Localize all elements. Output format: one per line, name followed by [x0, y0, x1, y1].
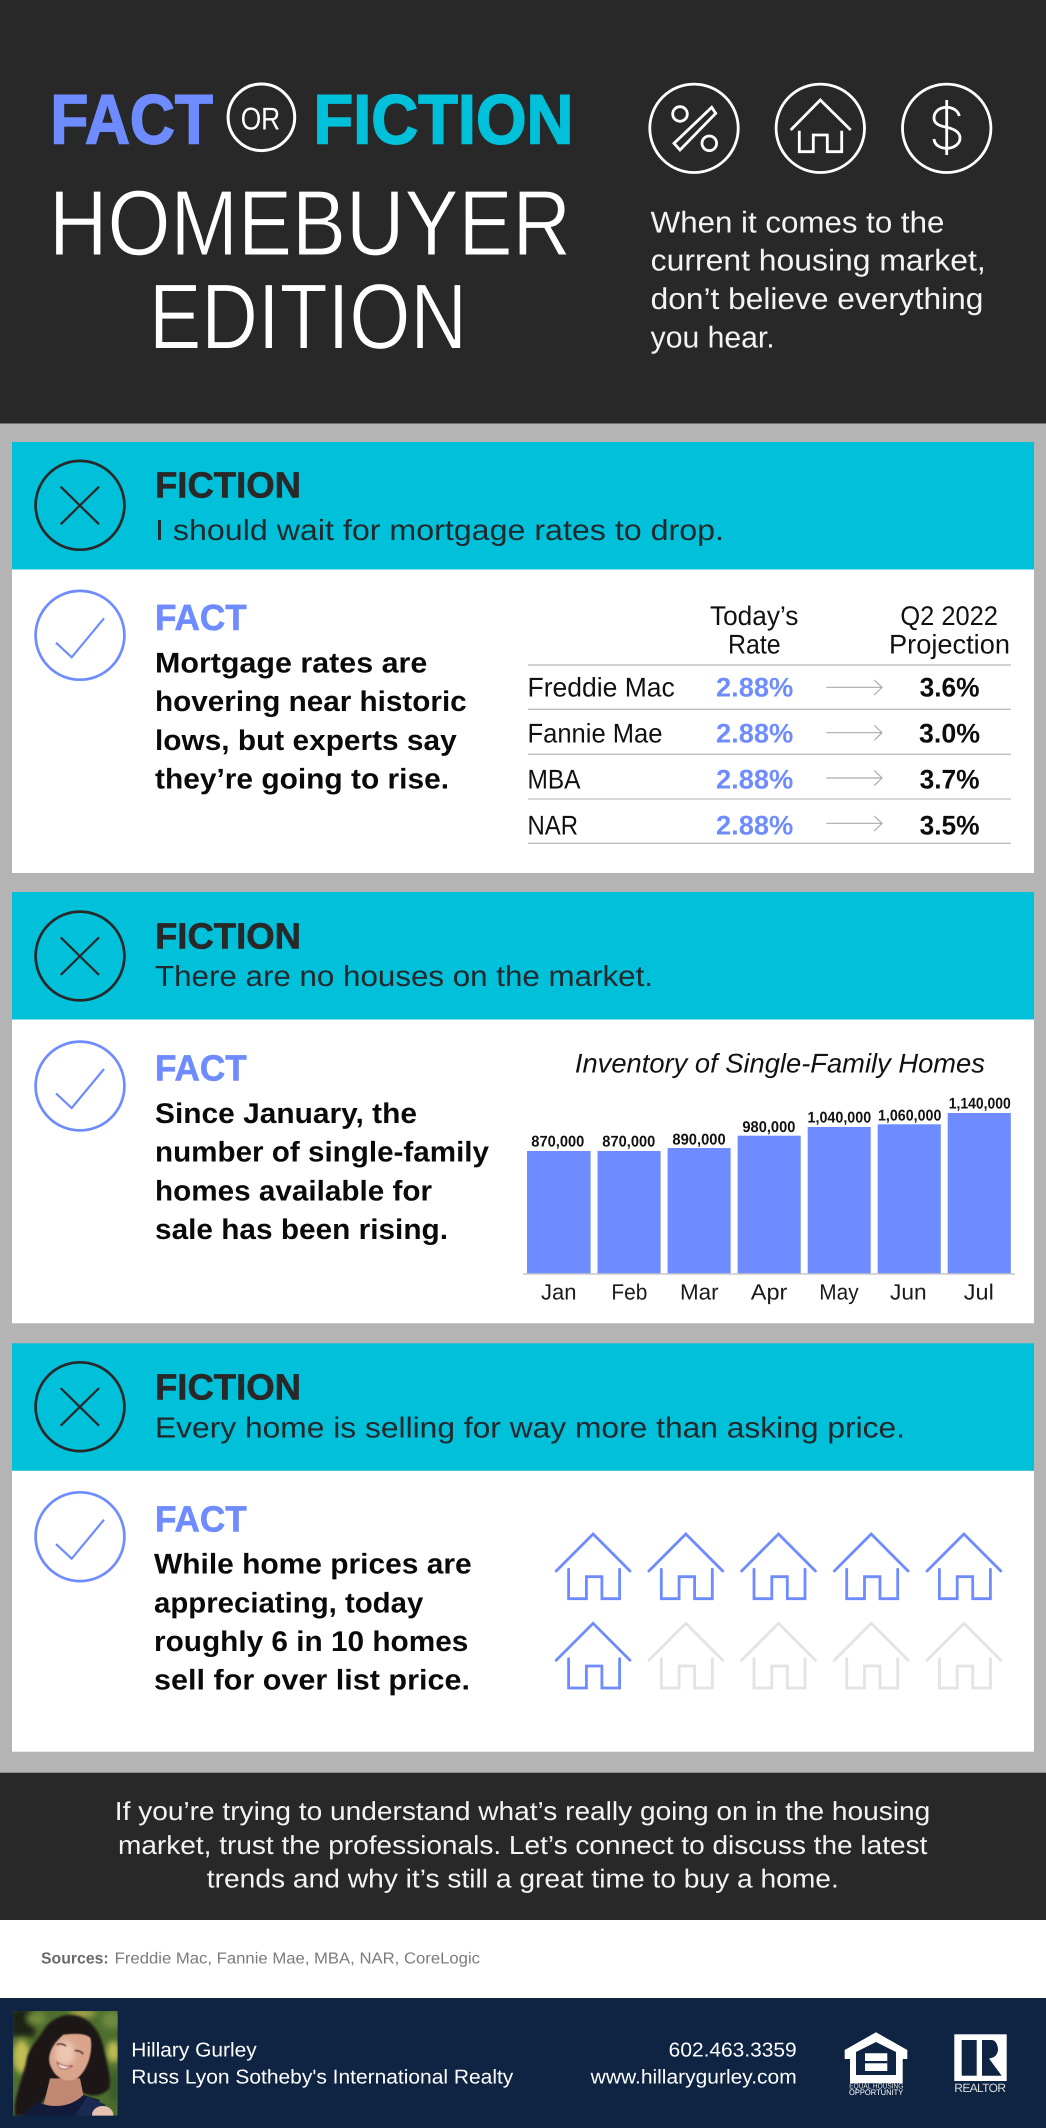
- fiction label: FICTION: [155, 465, 301, 506]
- logo: realtor: [954, 2034, 1007, 2095]
- bar chart: inventory of single-family homes: Mar: [680, 1279, 719, 1304]
- fact label: FACT: [155, 1499, 247, 1540]
- agent name and company: Russ Lyon Sotheby's International Realty: [131, 2066, 513, 2088]
- header panel: [0, 0, 1046, 424]
- agent contact: www.hillarygurley.com: [590, 2066, 797, 2088]
- sources: [0, 1920, 1046, 1998]
- row: freddie mac: Freddie Mac: [528, 673, 675, 703]
- agent photo: [13, 2011, 118, 2116]
- icon: check circle: [36, 1492, 124, 1581]
- row: fannie mae: 2.88%: [716, 719, 793, 749]
- row: nar: NAR: [528, 810, 578, 840]
- bar chart: inventory of single-family homes: May: [819, 1279, 859, 1304]
- row: mba: MBA: [528, 764, 580, 794]
- agent contact: 602.463.3359: [669, 2040, 797, 2062]
- bar chart: inventory of single-family homes: 1,060,000: [878, 1108, 941, 1125]
- fact text: sell for over list price.: [154, 1664, 470, 1696]
- logo: equal housing opportunity: OPPORTUNITY: [849, 2088, 904, 2097]
- intro text: [651, 206, 986, 355]
- fact text: lows, but experts say: [155, 725, 457, 757]
- bar chart: inventory of single-family homes: 1,040,000: [808, 1109, 871, 1126]
- badge: or: OR: [241, 100, 280, 136]
- title: fiction: FICTION: [314, 80, 574, 158]
- icon: dollar: [902, 84, 991, 172]
- bar chart: inventory of single-family homes: Feb: [611, 1279, 647, 1304]
- icon: house: [776, 84, 864, 172]
- fact text: sale has been rising.: [155, 1214, 448, 1246]
- title: homebuyer: HOMEBUYER: [49, 171, 571, 275]
- shoulder: [92, 2106, 114, 2116]
- table: rate projections: [528, 601, 1011, 843]
- bar chart: inventory of single-family homes: Apr: [751, 1279, 787, 1304]
- fact text: [155, 647, 467, 795]
- agent name and company: [131, 2040, 513, 2088]
- logo: equal housing opportunity: [845, 2032, 907, 2097]
- row: mba: 3.7%: [920, 764, 980, 794]
- row: freddie mac: [528, 673, 980, 703]
- table: rate projections: Q2 2022: [900, 601, 998, 631]
- call to action: If you’re trying to understand what’s really going on in the housing: [115, 1796, 930, 1826]
- fact text: While home prices are: [154, 1548, 472, 1580]
- row: freddie mac: 2.88%: [716, 673, 793, 703]
- icon: check circle: [36, 591, 124, 680]
- fiction statement: Every home is selling for way more than asking price.: [155, 1413, 905, 1445]
- bar chart: inventory of single-family homes: 1,140,000: [949, 1095, 1011, 1112]
- fact text: number of single-family: [155, 1137, 489, 1169]
- fact text: they’re going to rise.: [155, 763, 449, 795]
- agent name and company: Hillary Gurley: [131, 2040, 257, 2062]
- row: nar: [528, 810, 980, 840]
- panel: asking price: [12, 1343, 1034, 1752]
- fact text: [154, 1548, 472, 1696]
- icon: x circle: [36, 912, 124, 1000]
- fact text: roughly 6 in 10 homes: [154, 1626, 468, 1658]
- fiction label: FICTION: [155, 915, 301, 956]
- bar chart: inventory of single-family homes: Jul: [964, 1279, 994, 1304]
- row: freddie mac: 3.6%: [920, 673, 980, 703]
- pictogram: 6 in 10 homes: [556, 1534, 1001, 1688]
- icon: percent: [650, 84, 738, 172]
- icon: x circle: [36, 461, 124, 550]
- bar chart: inventory of single-family homes: Jan: [541, 1279, 576, 1304]
- face: [49, 2034, 91, 2080]
- fiction statement: I should wait for mortgage rates to drop.: [155, 515, 724, 547]
- fact text: appreciating, today: [154, 1587, 423, 1619]
- row: fannie mae: Fannie Mae: [528, 719, 662, 749]
- intro text: don’t believe everything: [651, 283, 983, 316]
- bar chart: inventory of single-family homes: Jun: [890, 1279, 927, 1304]
- logo: realtor: REALTOR: [954, 2081, 1006, 2095]
- table: rate projections: Rate: [728, 629, 781, 659]
- bar chart: inventory of single-family homes: 870,000: [602, 1134, 655, 1151]
- fiction statement: There are no houses on the market.: [155, 961, 653, 993]
- fact text: [155, 1098, 489, 1246]
- agent footer: [0, 1998, 1046, 2128]
- agent contact: [590, 2040, 797, 2088]
- fact text: homes available for: [155, 1176, 432, 1208]
- intro text: current housing market,: [651, 245, 986, 278]
- fiction label: FICTION: [155, 1366, 301, 1407]
- sources: Sources:: [41, 1950, 109, 1967]
- dress: [22, 2095, 100, 2116]
- bar chart: inventory of single-family homes: 870,000: [531, 1134, 584, 1151]
- eyes and smile: [57, 2044, 83, 2069]
- row: fannie mae: 3.0%: [919, 719, 980, 749]
- call to action: [0, 1773, 1046, 1920]
- title: fact: FACT: [50, 80, 213, 158]
- row: fannie mae: [528, 719, 980, 749]
- fact text: Since January, the: [155, 1098, 417, 1130]
- row: nar: 3.5%: [920, 810, 980, 840]
- bar chart: inventory of single-family homes: 890,000: [672, 1131, 726, 1148]
- bar chart: inventory of single-family homes: 980,000: [742, 1119, 795, 1136]
- row: mba: [528, 764, 980, 794]
- call to action: trends and why it’s still a great time to buy a home.: [207, 1863, 839, 1893]
- call to action: market, trust the professionals. Let’s connect to discuss the latest: [118, 1830, 928, 1860]
- sources: Freddie Mac, Fannie Mae, MBA, NAR, CoreLogic: [115, 1950, 480, 1967]
- bar chart: inventory of single-family homes: [523, 1049, 1015, 1304]
- row: nar: 2.88%: [716, 810, 793, 840]
- hair: [15, 2015, 110, 2116]
- table: rate projections: Projection: [889, 629, 1010, 659]
- intro text: When it comes to the: [651, 206, 944, 239]
- table: rate projections: Today’s: [710, 601, 798, 631]
- logo: equal housing opportunity: EQUAL HOUSING: [849, 2082, 903, 2091]
- icon: x circle: [36, 1362, 124, 1451]
- row: mba: 2.88%: [716, 764, 793, 794]
- bar chart: inventory of single-family homes: Inventory of Single-Family Homes: [575, 1049, 985, 1079]
- panel: mortgage rates: [12, 442, 1034, 873]
- intro text: you hear.: [651, 322, 775, 355]
- icon: check circle: [36, 1042, 124, 1130]
- title: edition: EDITION: [149, 264, 467, 368]
- fact label: FACT: [155, 597, 247, 638]
- fact text: hovering near historic: [155, 686, 467, 718]
- fact label: FACT: [155, 1048, 247, 1089]
- panel: inventory: [12, 892, 1034, 1323]
- neck and chest: [43, 2078, 83, 2107]
- badge: or: [228, 84, 295, 151]
- fact text: Mortgage rates are: [155, 647, 427, 679]
